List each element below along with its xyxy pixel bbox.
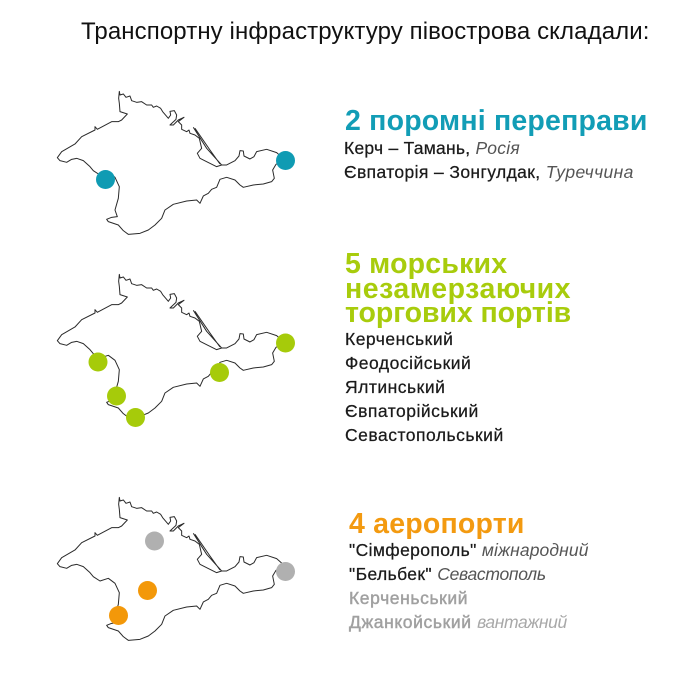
text: Belbek: "Бельбек" Севастополь <box>349 564 546 584</box>
map: ferry crossings <box>56 90 295 235</box>
text: port list: Ялтинський <box>345 377 445 397</box>
text: Kerch airport: Керченьський <box>349 588 468 608</box>
heading: sea ports: незамерзаючих <box>345 272 571 304</box>
text: port list: Феодосійський <box>345 353 471 373</box>
map: airports <box>56 496 295 641</box>
text: Kerch route: Керч – Тамань, Росія <box>344 138 520 158</box>
dot: Kerch <box>276 151 295 170</box>
panel: ferries <box>56 90 295 235</box>
panel: sea ports <box>56 274 295 427</box>
text: Simferopol: "Сімферополь" міжнародний <box>349 540 589 560</box>
text: port list <box>345 329 504 445</box>
heading: sea ports: 5 морських <box>345 248 507 280</box>
panel: airports <box>56 496 295 641</box>
heading: airports: 4 аеропорти <box>349 508 525 540</box>
heading: sea ports <box>345 248 571 329</box>
text: Dzhankoi: Джанкойський вантажний <box>349 612 567 632</box>
map: sea ports <box>56 274 295 427</box>
text: port list: Євпаторійський <box>345 401 479 421</box>
dots: ports <box>88 334 295 427</box>
text: port list: Керченський <box>345 329 453 349</box>
heading: ferries: 2 поромні переправи <box>345 105 648 137</box>
text: Yevpatoria route: Євпаторія – Зонгулдак, Туреччина <box>344 162 634 182</box>
title: Транспортну інфраструктуру півострова складали: <box>81 18 650 45</box>
heading: sea ports: торгових портів <box>345 297 571 329</box>
dots: airports <box>109 532 295 625</box>
dot: Yevpatoria <box>96 170 115 189</box>
text: port list: Севастопольський <box>345 425 504 445</box>
